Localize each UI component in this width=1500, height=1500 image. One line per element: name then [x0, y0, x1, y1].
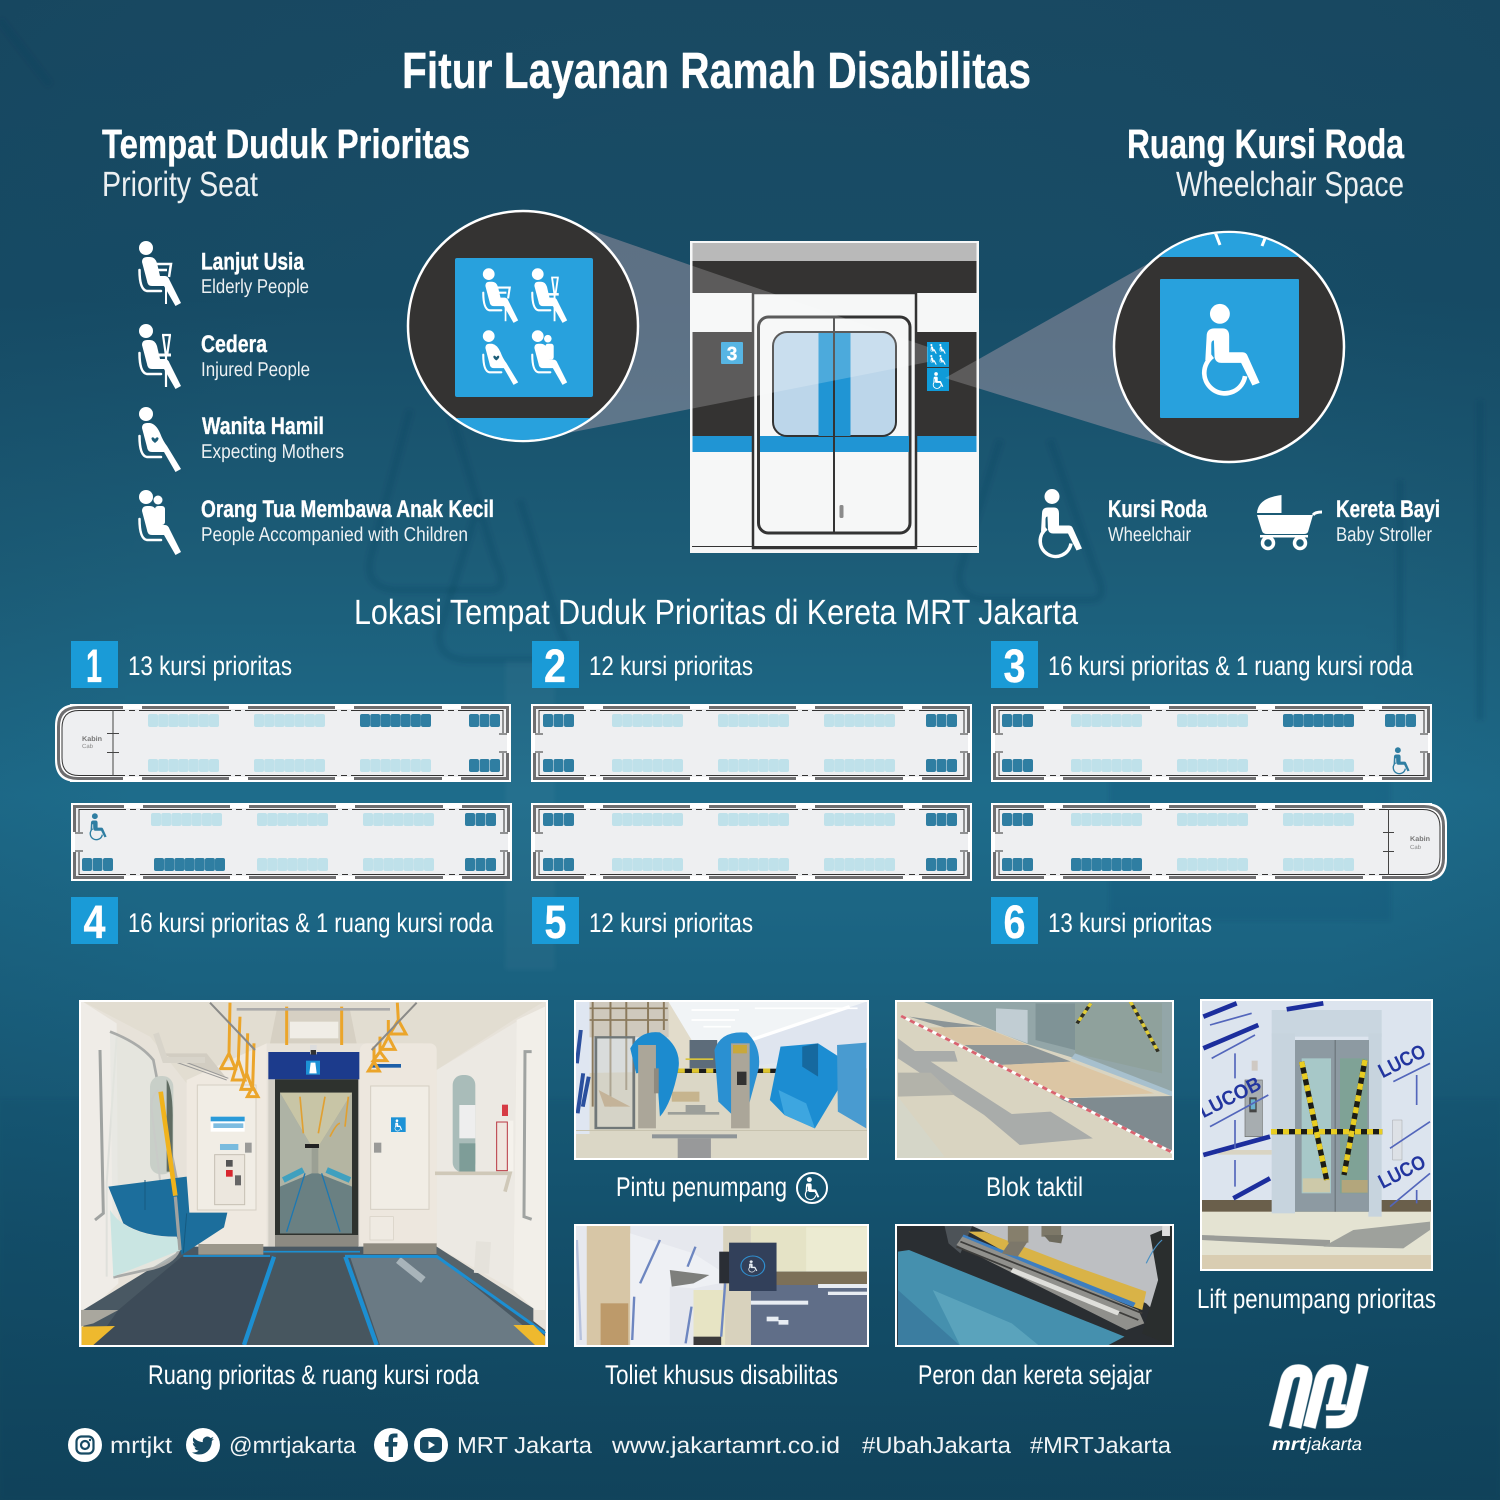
item: injured: Injured People — [201, 359, 310, 381]
photo: accessible toilet — [565, 1223, 881, 1350]
photo: train interior — [70, 990, 560, 1360]
car number sign — [721, 342, 743, 365]
car 2 plan — [531, 704, 972, 782]
callout beam: wheelchair — [945, 258, 1185, 452]
footer: social links: MRT Jakarta — [457, 1432, 592, 1458]
icon: wheelchair badge — [797, 1173, 827, 1203]
icon: facebook — [374, 1428, 408, 1462]
heading: wheelchair space: Ruang Kursi Roda — [1127, 121, 1405, 167]
item: with children: Orang Tua Membawa Anak Kecil — [201, 496, 494, 523]
car 3 label: 3 — [1004, 639, 1026, 692]
item: elderly: Elderly People — [201, 276, 309, 298]
car number sign: 3 — [727, 344, 737, 365]
icon: instagram — [68, 1428, 102, 1462]
heading: priority seat: Tempat Duduk Prioritas — [102, 121, 470, 167]
car 6 label: 6 — [1004, 895, 1026, 948]
car 4 label: 4 — [84, 895, 106, 948]
photo: priority lift: LUCO — [1374, 1150, 1429, 1193]
item: with children: People Accompanied with Children — [201, 524, 468, 546]
heading: wheelchair space: Wheelchair Space — [1176, 165, 1404, 204]
car 1 plan: Cab — [82, 743, 94, 750]
car 6 label — [991, 895, 1212, 948]
footer: social links: mrtjkt — [110, 1432, 173, 1458]
item: expecting mothers — [139, 407, 344, 472]
photo: priority lift: LUCOB — [1195, 1072, 1265, 1122]
item: elderly: Lanjut Usia — [201, 248, 305, 276]
icon: twitter — [186, 1428, 220, 1462]
car 2 label: 2 — [544, 639, 566, 692]
item: with children — [139, 490, 494, 555]
item: injured: Cedera — [201, 331, 268, 358]
item: expecting mothers: Wanita Hamil — [202, 413, 324, 440]
heading: wheelchair space — [1127, 121, 1405, 204]
footer: social links: #UbahJakarta — [862, 1432, 1011, 1458]
callout beam: priority seat — [568, 228, 928, 433]
photo: priority lift: LUCO — [1374, 1040, 1429, 1082]
priority groups list — [139, 241, 494, 555]
caption: tactile: Blok taktil — [986, 1172, 1083, 1202]
legend: baby stroller — [1257, 495, 1440, 548]
car 6 plan: Cab — [1410, 844, 1422, 851]
footer: social links: #MRTJakarta — [1030, 1432, 1171, 1458]
car 1 plan: Kabin — [82, 735, 102, 743]
footer: social links: @mrtjakarta — [229, 1432, 356, 1458]
legend: baby stroller: Baby Stroller — [1336, 524, 1432, 546]
legend: baby stroller: Kereta Bayi — [1336, 496, 1440, 523]
car 3 label: 16 kursi prioritas & 1 ruang kursi roda — [1048, 651, 1414, 681]
car 4 plan — [71, 803, 512, 881]
car 6 label: 13 kursi prioritas — [1048, 908, 1212, 938]
callout circle: priority seat sign — [406, 210, 640, 442]
car 5 label: 12 kursi prioritas — [589, 908, 753, 938]
item: injured — [139, 324, 310, 389]
item: expecting mothers: Expecting Mothers — [201, 441, 344, 463]
car 2 label — [532, 639, 753, 692]
caption: gates: Pintu penumpang — [616, 1172, 787, 1202]
callout circle: wheelchair sign — [1112, 230, 1346, 464]
car 4 label: 16 kursi prioritas & 1 ruang kursi roda — [128, 908, 494, 938]
car 1 label: 13 kursi prioritas — [128, 651, 292, 681]
photo: tactile blocks — [893, 997, 1178, 1163]
car 6 plan — [991, 803, 1447, 881]
small wheelchair sign — [927, 368, 949, 391]
legend: wheelchair — [1040, 489, 1208, 556]
legend: wheelchair: Wheelchair — [1108, 524, 1191, 546]
car 5 label: 5 — [544, 895, 566, 948]
caption: interior: Ruang prioritas & ruang kursi roda — [148, 1360, 480, 1390]
caption: toilet: Toliet khusus disabilitas — [605, 1360, 838, 1390]
footer: social links — [68, 1428, 1171, 1462]
car 5 label — [532, 895, 753, 948]
heading: location: Lokasi Tempat Duduk Prioritas di Kereta MRT Jakarta — [354, 593, 1078, 632]
car 1 label: 1 — [86, 639, 102, 692]
car 3 label — [991, 639, 1414, 692]
logo: mrt jakarta: jakarta — [1304, 1434, 1362, 1454]
car 4 label — [71, 895, 494, 948]
photo: platform gap — [893, 1223, 1178, 1350]
legend: wheelchair: Kursi Roda — [1108, 496, 1208, 523]
caption: platform: Peron dan kereta sejajar — [918, 1360, 1152, 1390]
small priority sign — [927, 342, 949, 367]
heading: priority seat — [102, 121, 470, 204]
heading: priority seat: Priority Seat — [102, 165, 258, 204]
car 1 plan — [55, 704, 511, 782]
train door illustration — [690, 241, 979, 553]
car 2 label: 12 kursi prioritas — [589, 651, 753, 681]
car 6 plan: Kabin — [1410, 835, 1430, 843]
photo: passenger gates — [565, 990, 881, 1163]
logo: mrt jakarta: mrt — [1272, 1434, 1307, 1454]
car 1 label — [71, 639, 292, 692]
icon: youtube — [414, 1428, 448, 1462]
car 3 plan — [991, 704, 1432, 782]
caption: lift: Lift penumpang prioritas — [1197, 1284, 1436, 1314]
photo: priority lift — [1195, 999, 1435, 1271]
logo: mrt jakarta — [1272, 1365, 1363, 1454]
item: elderly — [139, 241, 309, 306]
car 5 plan — [531, 803, 972, 881]
footer: social links: www.jakartamrt.co.id — [611, 1432, 840, 1458]
title: Fitur Layanan Ramah Disabilitas — [402, 42, 1031, 99]
